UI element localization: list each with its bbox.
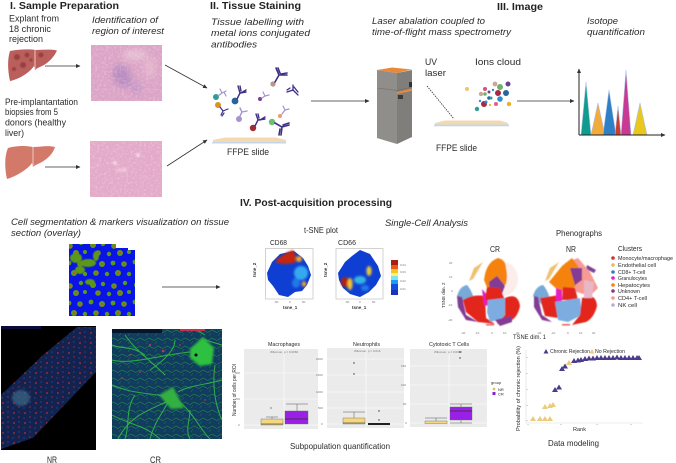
text: isotope quantification: Isotope bbox=[587, 16, 618, 27]
image: CR tissue bbox=[112, 329, 222, 439]
label: FFPE slide: FFPE slide bbox=[436, 143, 477, 154]
legend: color bar: 0.01 bbox=[400, 287, 406, 291]
axis labels: phenographs: TSNE dim. 1 bbox=[513, 335, 547, 341]
axis labels: t-SNE: tsne_1 bbox=[352, 305, 367, 310]
chart: boxplot neutrophils: 2000 bbox=[316, 357, 323, 361]
chart: boxplot cytotoxic T cells: 150 bbox=[401, 364, 406, 368]
text: laser ablation bbox=[372, 16, 512, 38]
chart: boxplot neutrophils bbox=[316, 342, 404, 428]
laser beam bbox=[427, 86, 454, 119]
text: isotope quantification: quantification bbox=[587, 27, 645, 38]
text: tissue labelling: Tissue labelling with bbox=[211, 17, 304, 28]
arrow: bottom histology to staining bbox=[167, 140, 207, 166]
text: pre-implantation biopsies: Pre-implantantation bbox=[5, 97, 78, 108]
icon: metal-conjugated antibodies bbox=[213, 68, 298, 135]
chart: boxplot neutrophils: 1000 bbox=[316, 390, 323, 394]
text: laser ablation: Laser abalation coupled to bbox=[372, 16, 485, 27]
axis labels: phenographs: -20 bbox=[537, 331, 542, 335]
icon: mass cytometer instrument bbox=[377, 68, 412, 144]
heading: single-cell analysis: Single-Cell Analysis bbox=[385, 218, 468, 229]
legend: group: NR bbox=[498, 387, 504, 392]
axis labels: phenographs: 20 bbox=[449, 261, 453, 265]
chart: boxplot neutrophils: 0 bbox=[321, 422, 323, 426]
axis labels: phenographs: 20 bbox=[516, 331, 520, 335]
chart: isotope peaks bbox=[579, 69, 665, 135]
chart: boxplot macrophages bbox=[235, 342, 318, 429]
legend: color bar bbox=[391, 260, 406, 295]
axis labels: phenographs: -20 bbox=[461, 331, 466, 335]
axis labels: t-SNE: -50 bbox=[274, 300, 279, 304]
text: tissue labelling bbox=[211, 17, 311, 50]
chart: data modeling scatter: Chronic Rejection bbox=[550, 349, 590, 355]
text: explant group: Explant from bbox=[9, 14, 59, 24]
chart: boxplot neutrophils: Wilcoxon, p = 0.016 bbox=[354, 349, 381, 353]
image: histology healthy bbox=[90, 141, 162, 197]
text: pre-implantation biopsies: biopsies from 5 bbox=[5, 107, 58, 118]
icon: FFPE slide laser stage bbox=[434, 120, 509, 126]
axis labels: t-SNE: -50 bbox=[345, 300, 350, 304]
axis labels: phenographs: -10 bbox=[448, 303, 453, 307]
icon: ions cloud bbox=[465, 82, 511, 111]
label: t-SNE plot: t-SNE plot bbox=[304, 225, 339, 235]
axis labels: phenographs: TSNE dim. 2 bbox=[441, 282, 446, 308]
icon: healthy liver bbox=[5, 146, 55, 179]
chart: boxplot cytotoxic T cells: 0 bbox=[405, 421, 407, 425]
arrow: staining to image bbox=[311, 100, 369, 102]
heading: III. Image: III. Image bbox=[497, 1, 543, 13]
legend: group: CR bbox=[498, 392, 504, 396]
legend: clusters: Unknown bbox=[618, 289, 640, 295]
text: tissue labelling: metal ions conjugated bbox=[211, 28, 311, 39]
legend: clusters bbox=[611, 246, 673, 309]
axis labels: t-SNE: tsne_2 bbox=[252, 262, 257, 277]
chart: boxplot neutrophils: 1500 bbox=[316, 373, 323, 377]
axis label: number of cells per ROI: Number of cells per ROI bbox=[232, 364, 238, 416]
text: identification of region of interest: region of interest bbox=[92, 26, 164, 37]
chart: boxplot cytotoxic T cells bbox=[401, 342, 487, 427]
axis labels: t-SNE: tsne_2 bbox=[323, 262, 328, 277]
chart: boxplot cytotoxic T cells: Cytotoxic T Cells bbox=[429, 342, 469, 348]
heading: I. Sample Preparation: I. Sample Preparation bbox=[10, 0, 119, 12]
text: explant group: 18 chronic bbox=[9, 24, 51, 35]
axis labels: t-SNE: 50 bbox=[302, 300, 306, 304]
text: pre-implantation biopsies bbox=[5, 97, 78, 139]
axis labels: phenographs: 10 bbox=[503, 331, 507, 335]
legend: group bbox=[491, 380, 504, 396]
text: pre-implantation biopsies: liver) bbox=[5, 128, 24, 139]
axis labels: phenographs: 0 bbox=[567, 331, 569, 335]
legend: color bar: 0.03 bbox=[400, 270, 406, 274]
axis labels: t-SNE: 0 bbox=[289, 300, 291, 304]
chart: boxplot cytotoxic T cells: Wilcoxon, p = 0.0002 bbox=[434, 350, 462, 354]
chart: data modeling scatter: Rank bbox=[573, 427, 586, 433]
text: explant group: rejection bbox=[9, 34, 43, 45]
text: pre-implantation biopsies: donors (healthy bbox=[5, 118, 66, 128]
label: data modeling: Data modeling bbox=[548, 438, 599, 448]
axis labels: t-SNE: 0 bbox=[359, 300, 361, 304]
text: cell segmentation: section (overlay) bbox=[11, 228, 81, 239]
chart: data modeling scatter bbox=[516, 346, 643, 433]
text: identification of region of interest: Identification of bbox=[92, 15, 159, 26]
chart: boxplot cytotoxic T cells: 100 bbox=[401, 383, 406, 387]
chart: boxplot macrophages: Wilcoxon, p = 0.0066 bbox=[270, 350, 298, 354]
chart: boxplot macrophages: 0 bbox=[238, 423, 240, 427]
axis labels: phenographs: -10 bbox=[475, 331, 480, 335]
text: cell segmentation: Cell segmentation & markers visualization on tissue bbox=[11, 217, 229, 228]
image: histology region of interest, rejection bbox=[91, 45, 162, 101]
label: CD66: CD66 bbox=[338, 238, 356, 247]
text: identification of region of interest bbox=[92, 15, 164, 37]
axis labels: phenographs: 0 bbox=[491, 331, 493, 335]
arrow: overlay to t-SNE bbox=[162, 286, 220, 288]
axis labels: phenographs: -20 bbox=[448, 318, 453, 322]
legend: color bar: 0.04 bbox=[400, 263, 406, 267]
text: cell segmentation bbox=[11, 217, 229, 239]
legend: clusters: CD4+ T-cell bbox=[618, 296, 647, 302]
chart: boxplot neutrophils: Neutrophils bbox=[353, 342, 380, 348]
legend: clusters: NK cell bbox=[618, 303, 637, 309]
legend: group: group bbox=[491, 380, 502, 385]
axis labels: phenographs bbox=[441, 261, 596, 341]
label: CD68: CD68 bbox=[270, 238, 287, 247]
image: segmentation overlay bbox=[69, 244, 135, 316]
image: NR tissue bbox=[1, 326, 96, 450]
text: isotope quantification bbox=[587, 16, 645, 38]
chart: boxplot macrophages: Macrophages bbox=[268, 342, 300, 348]
label: NR phenograph: NR bbox=[566, 245, 576, 254]
legend: clusters: Granulocytes bbox=[618, 276, 647, 282]
legend: clusters: Clusters bbox=[618, 246, 642, 253]
chart: boxplot macrophages: 400 bbox=[235, 371, 240, 375]
arrow: top histology to staining bbox=[165, 65, 207, 88]
heading: IV. Post-acquisition processing: IV. Post-acquisition processing bbox=[240, 197, 392, 209]
axis labels: phenographs: 0 bbox=[451, 289, 453, 293]
axis labels: t-SNE: tsne_1 bbox=[283, 305, 298, 310]
chart: data modeling scatter: No Rejection bbox=[595, 349, 625, 355]
text: explant group bbox=[9, 14, 59, 45]
legend: clusters: CD8+ T-cell bbox=[618, 270, 645, 276]
chart: boxplot macrophages: 200 bbox=[235, 397, 240, 401]
label: Ions cloud: Ions cloud bbox=[475, 57, 521, 68]
legend: clusters: Hepatocytes bbox=[618, 283, 650, 289]
label: FFPE slide: FFPE slide bbox=[227, 147, 269, 158]
label: UV laser bbox=[425, 57, 446, 79]
axis labels: t-SNE bbox=[252, 262, 376, 310]
chart: phenograph CR bbox=[457, 258, 520, 326]
heading: II. Tissue Staining: II. Tissue Staining bbox=[210, 0, 301, 12]
chart: t-SNE CD68 bbox=[266, 248, 313, 299]
legend: color bar: 0.02 bbox=[400, 279, 406, 283]
text: laser ablation: time-of-flight mass spectrometry bbox=[372, 27, 512, 38]
arrow: diseased liver to tissue bbox=[45, 65, 80, 67]
label: Phenographs: Phenographs bbox=[556, 229, 602, 238]
chart: boxplot neutrophils: 500 bbox=[318, 406, 323, 410]
axis labels: phenographs: -10 bbox=[551, 331, 556, 335]
label: subpopulation quantification: Subpopulation quantification bbox=[290, 441, 390, 451]
chart: t-SNE CD66 bbox=[336, 248, 383, 299]
chart: data modeling scatter: Probability of chronic rejection (%) bbox=[516, 346, 522, 431]
axis labels: t-SNE: 50 bbox=[372, 300, 376, 304]
axis labels: phenographs: 10 bbox=[449, 275, 453, 279]
arrow: healthy liver to tissue bbox=[45, 166, 80, 168]
text: tissue labelling: antibodies bbox=[211, 40, 257, 50]
chart: boxplot cytotoxic T cells: 50 bbox=[403, 402, 407, 406]
arrow: image to quantification bbox=[517, 100, 574, 102]
legend: clusters: Monocyte/macrophage bbox=[618, 256, 673, 262]
legend: clusters: Endothelial cell bbox=[618, 263, 656, 269]
label: UV laser: laser bbox=[425, 68, 446, 79]
icon: diseased liver bbox=[8, 49, 57, 81]
chart: phenograph NR bbox=[533, 258, 598, 326]
axis labels: phenographs: 10 bbox=[579, 331, 583, 335]
label: UV laser: UV bbox=[425, 57, 438, 68]
label: CR phenograph: CR bbox=[490, 245, 500, 254]
icon: FFPE slide staining bbox=[212, 138, 286, 144]
axis labels: phenographs: 20 bbox=[592, 331, 596, 335]
